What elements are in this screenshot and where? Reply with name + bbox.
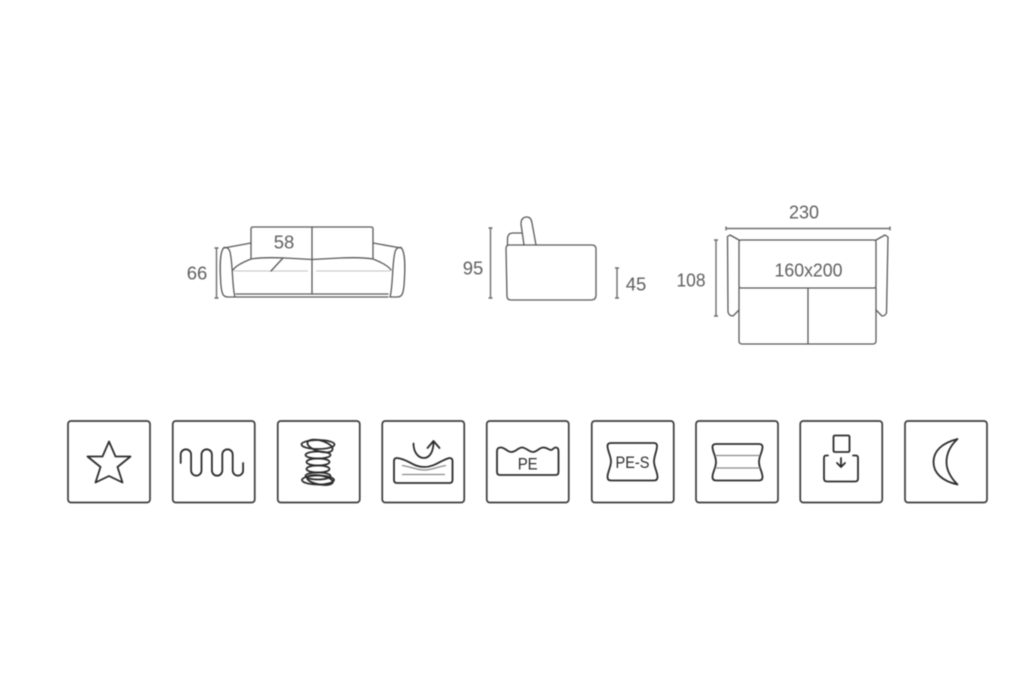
panel: side view dimensions [463, 217, 646, 300]
icon: star [68, 421, 150, 502]
height dimension line: 95 [488, 228, 492, 298]
side view sofa drawing [506, 217, 596, 300]
dimension label: 108: 108 [676, 270, 706, 290]
icon: crescent moon [905, 421, 987, 502]
dimension label: 58: 58 [274, 232, 294, 252]
depth dimension line: 108 [714, 240, 718, 316]
width dimension line: 230 [726, 226, 890, 230]
icon: removable cushion into storage box [800, 421, 882, 502]
dimension label: 45: 45 [626, 274, 646, 294]
icon: coil spring [278, 421, 360, 502]
seat height dimension line: 45 [615, 268, 619, 298]
panel: feature icon row [68, 421, 987, 502]
top view sofa drawing [728, 235, 888, 344]
front view sofa drawing [220, 227, 405, 297]
icon: PE foam [487, 421, 569, 502]
panel: front view dimensions [187, 227, 405, 298]
panel: top view dimensions [676, 202, 890, 344]
dimension label: 95: 95 [463, 258, 483, 278]
height dimension line: 66 [214, 248, 218, 298]
icon: PE foam: PE [518, 454, 538, 473]
dimension label: 160x200: 160x200 [774, 260, 842, 280]
dimension label: 66: 66 [187, 262, 207, 284]
icon: PE-S foam [592, 421, 674, 502]
icon: memory foam with return arrow [382, 421, 464, 502]
dimension label: 230: 230 [789, 202, 819, 222]
icon: PE-S foam: PE-S [616, 453, 650, 472]
icon: zigzag spring [173, 421, 255, 502]
icon: layered cushion [696, 421, 778, 502]
